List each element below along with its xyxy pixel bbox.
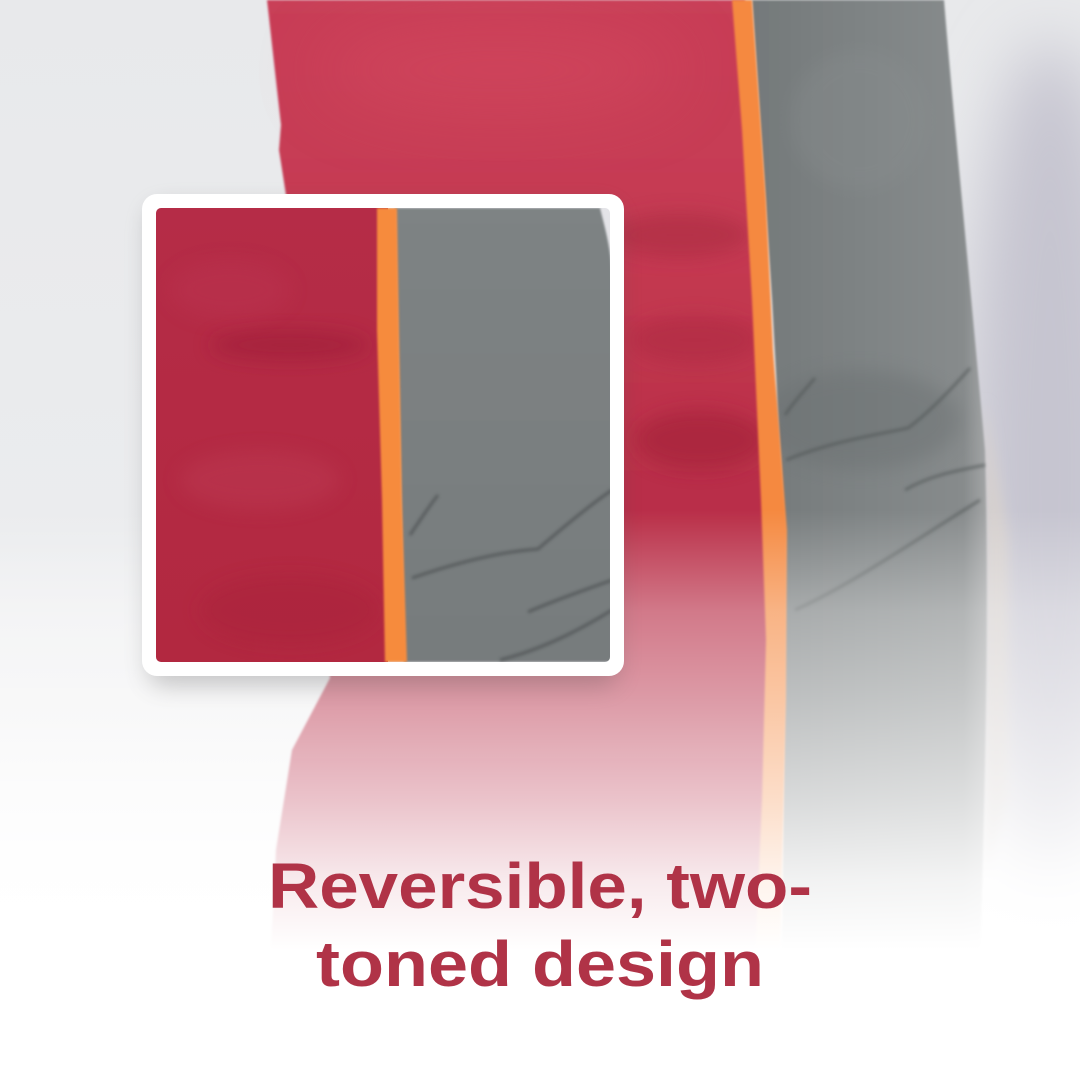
inset shadow (148, 206, 618, 686)
right side shadow (965, 40, 1080, 900)
cushion: grey face (752, 0, 987, 960)
title: Reversible, two- (268, 850, 812, 922)
cushion photo (267, 0, 987, 970)
closeup: orange piping (377, 208, 407, 662)
title (268, 850, 812, 1000)
bottom fade overlay (0, 510, 1080, 950)
cushion: red velvet face (267, 0, 778, 970)
panel frame (142, 194, 624, 676)
closeup: grey fabric (395, 208, 612, 662)
cushion: orange piping (732, 0, 787, 960)
inset zoom panel (142, 194, 624, 676)
closeup: red fabric (156, 208, 388, 662)
title: toned design (316, 928, 764, 1000)
closeup image (156, 208, 612, 662)
